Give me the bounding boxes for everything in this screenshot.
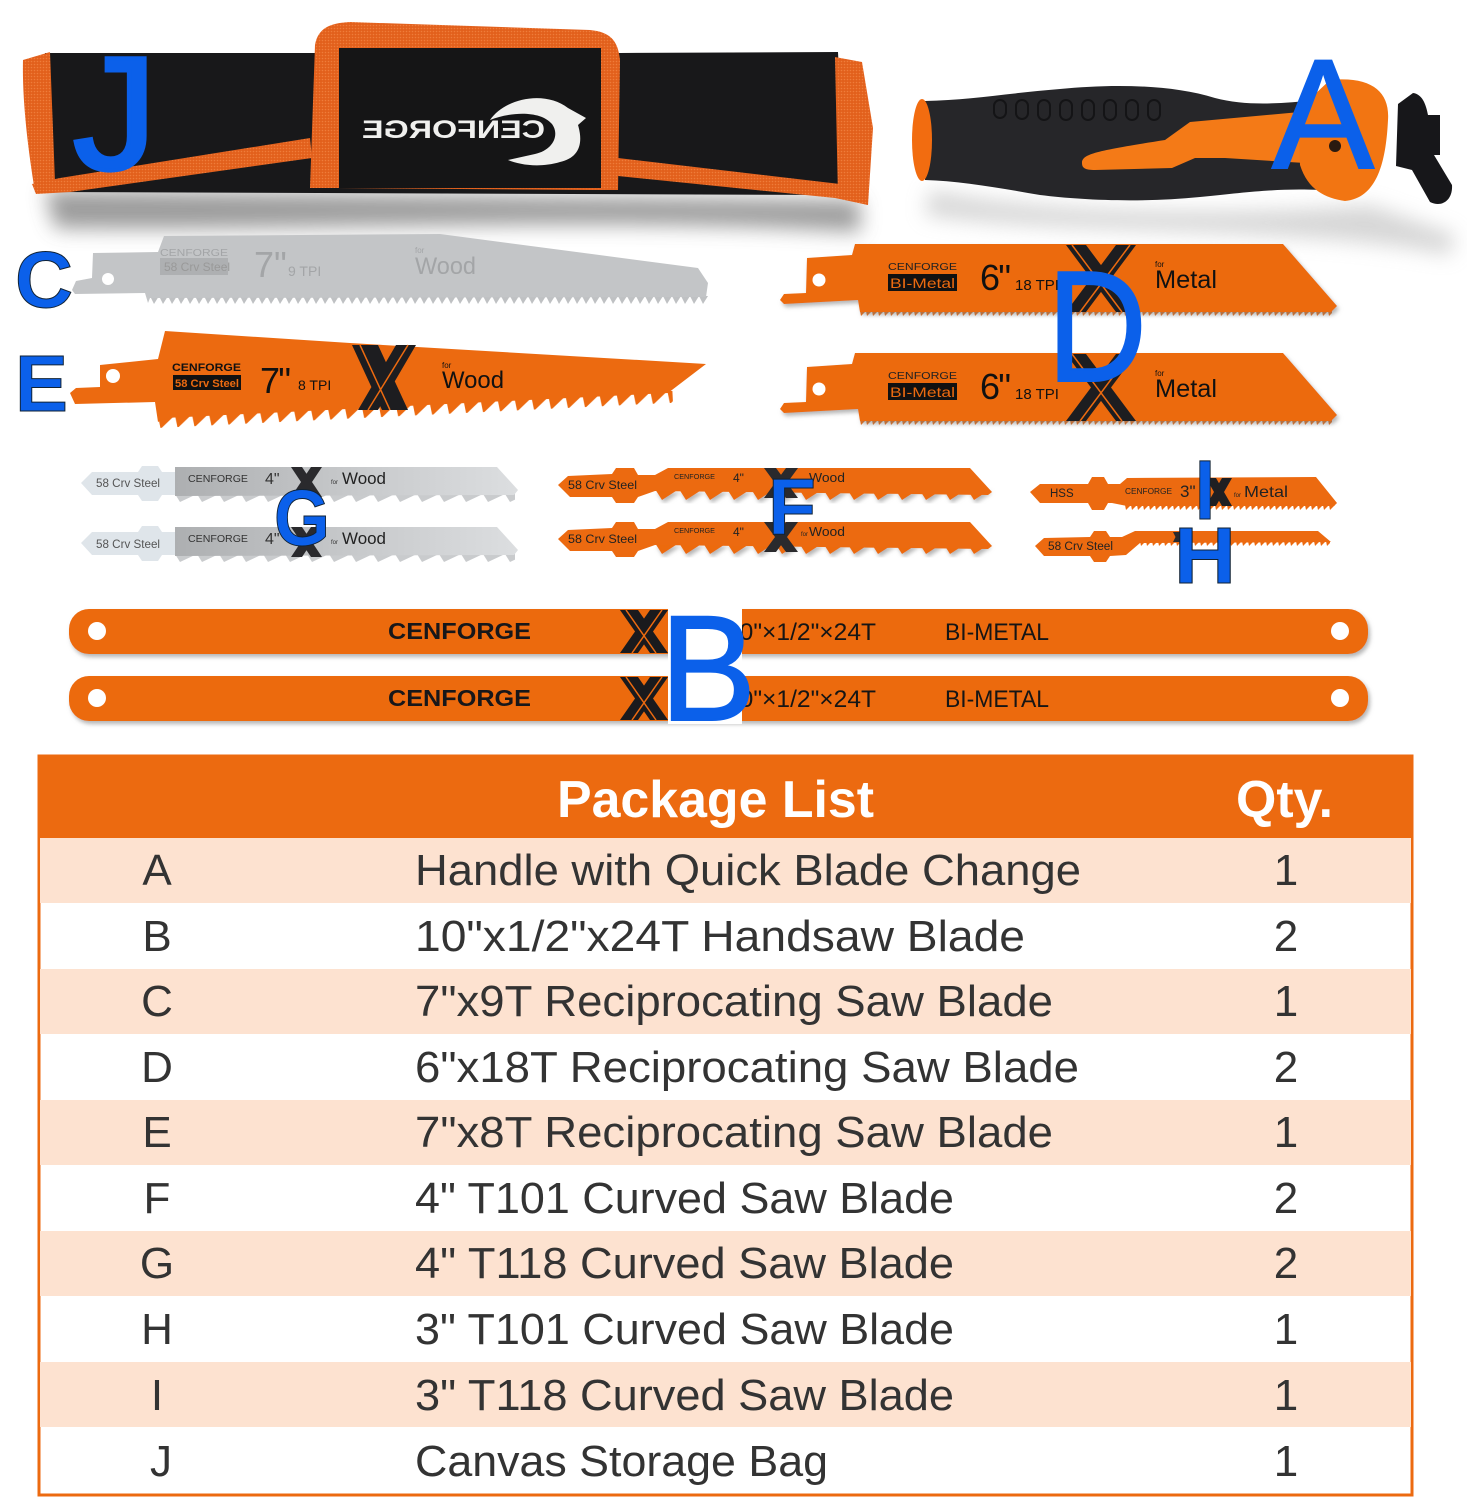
blade teeth <box>1125 505 1335 511</box>
X mark <box>291 467 322 497</box>
blade tang <box>81 466 176 501</box>
blue part letters: B <box>660 584 756 752</box>
bag left end binding <box>23 52 55 192</box>
quantity column: 1 <box>1274 846 1298 895</box>
striped rows <box>40 838 1411 1427</box>
quantity column: 2 <box>1274 1043 1298 1092</box>
handle shadow <box>925 190 1455 255</box>
blade E: orange wood blade: 8 TPI <box>298 377 331 393</box>
quantity column <box>1274 846 1298 1486</box>
blade E: orange wood blade <box>70 331 706 428</box>
part letters column: G <box>140 1239 174 1288</box>
blade F: lower orange jigsaw blade: for <box>801 532 808 538</box>
descriptions column: 6"x18T Reciprocating Saw Blade <box>415 1043 1079 1092</box>
blade body <box>1030 477 1337 510</box>
package list table <box>38 755 1413 1495</box>
quick change clamp <box>1396 93 1452 204</box>
handle with quick blade change <box>912 79 1455 255</box>
wordmark: CENFORGE <box>388 685 531 711</box>
part letters column: I <box>151 1371 163 1420</box>
blade F: upper orange jigsaw blade <box>558 468 992 503</box>
part letters column: J <box>150 1437 172 1486</box>
bag shadow <box>45 190 860 232</box>
descriptions column: 4" T118 Curved Saw Blade <box>415 1239 954 1288</box>
descriptions column: 3" T118 Curved Saw Blade <box>415 1371 954 1420</box>
blade B: upper handsaw blade <box>69 609 1368 654</box>
blade F: upper orange jigsaw blade: CENFORGE <box>674 474 715 481</box>
blade label: for <box>415 246 425 255</box>
blade body <box>558 468 992 503</box>
blade spec: 10"×1/2"×24T <box>726 686 876 713</box>
blade teeth <box>150 296 708 304</box>
blade label: 58 Crv Steel <box>568 478 637 492</box>
blade D: lower metal blade: Metal <box>1155 375 1217 403</box>
descriptions column: 7"x8T Reciprocating Saw Blade <box>415 1108 1053 1157</box>
blade D: lower metal blade: 6" <box>980 366 1011 407</box>
blade E: orange wood blade: Wood <box>442 367 504 394</box>
blade G: upper silver jigsaw blade <box>81 466 518 502</box>
logo panel <box>339 48 601 188</box>
blade teeth <box>158 391 673 428</box>
X mark <box>764 522 798 552</box>
orange nose <box>1298 79 1388 201</box>
X mark <box>620 610 668 653</box>
blade G: lower silver jigsaw blade: 4" <box>265 531 280 548</box>
blade label: 9 TPI <box>288 263 321 279</box>
gator logo <box>490 98 586 165</box>
blade D: upper metal blade: BI-Metal <box>890 275 955 291</box>
part letters column: C <box>141 977 173 1026</box>
blade G: upper silver jigsaw blade: CENFORGE <box>188 474 248 485</box>
blue part letters: F <box>768 462 816 551</box>
blade label: 58 Crv Steel <box>164 260 230 274</box>
blade spec: 10"×1/2"×24T <box>726 619 876 646</box>
X mark <box>1066 354 1136 421</box>
blade G: lower silver jigsaw blade: CENFORGE <box>188 534 248 545</box>
table header <box>38 755 1413 838</box>
blade G: lower silver jigsaw blade: Wood <box>342 529 386 548</box>
grip body <box>925 86 1320 200</box>
part letters column: A <box>142 846 172 895</box>
quantity column: 2 <box>1274 1239 1298 1288</box>
blue part letters: A <box>1272 28 1374 202</box>
logo wordmark: CENFORGE <box>362 116 545 144</box>
quantity column: 1 <box>1274 1437 1298 1486</box>
blade body <box>72 234 708 303</box>
part letters column <box>140 846 174 1486</box>
nose bolt <box>1329 140 1341 152</box>
blade label: 58 Crv Steel <box>1048 541 1113 553</box>
blade label: CENFORGE <box>172 362 241 374</box>
blade D: upper metal blade: 6" <box>980 257 1011 298</box>
blade teeth <box>175 494 515 502</box>
part letters column: F <box>144 1174 170 1223</box>
quantity column: 1 <box>1274 1305 1298 1354</box>
X mark <box>291 527 322 557</box>
blade C: silver reciprocating blade <box>72 234 708 304</box>
blade F: upper orange jigsaw blade: Wood <box>809 470 845 485</box>
grip ribs <box>994 100 1160 120</box>
blade E: orange wood blade: 58 Crv Steel <box>175 378 239 390</box>
blade I: HSS metal jigsaw blade: for <box>1234 493 1241 499</box>
blade G: lower silver jigsaw blade: for <box>331 540 338 546</box>
quantity column: 2 <box>1274 912 1298 961</box>
blade G: upper silver jigsaw blade: 4" <box>265 471 280 488</box>
descriptions column: Handle with Quick Blade Change <box>415 846 1081 895</box>
blade G: upper silver jigsaw blade: Wood <box>342 469 386 488</box>
blade teeth <box>860 311 1332 316</box>
blade label: CENFORGE <box>160 248 228 259</box>
blade D: upper metal blade: 18 TPI <box>1015 277 1059 294</box>
blade teeth <box>175 554 515 562</box>
blade G: upper silver jigsaw blade: for <box>331 480 338 486</box>
X mark <box>620 677 668 720</box>
strap loop with panel <box>310 22 620 190</box>
blade B: lower handsaw blade: BI-METAL <box>945 686 1049 713</box>
bag right end binding <box>835 57 873 205</box>
X mark <box>764 468 798 498</box>
mounting holes <box>88 689 106 707</box>
blade label: HSS <box>1050 488 1074 500</box>
blade label: 58 Crv Steel <box>96 537 160 551</box>
blade body <box>558 522 992 557</box>
blade G: lower silver jigsaw blade <box>81 526 518 562</box>
X mark <box>1173 532 1183 542</box>
blue part letters: H <box>1174 511 1236 600</box>
blade teeth <box>655 489 989 500</box>
orange end cap <box>912 99 932 181</box>
mounting holes <box>88 622 106 640</box>
canvas storage bag <box>23 22 873 232</box>
blade B: lower handsaw blade <box>69 676 1368 721</box>
quantity column: 1 <box>1274 1108 1298 1157</box>
blue part letters <box>15 24 1374 752</box>
blade body <box>1035 531 1331 562</box>
descriptions column: Canvas Storage Bag <box>415 1437 828 1486</box>
blue part letters: G <box>274 473 330 562</box>
blade D: lower metal blade: BI-Metal <box>890 384 955 400</box>
blade teeth <box>655 543 989 554</box>
blade D: upper metal blade <box>780 244 1337 316</box>
blade tang <box>81 526 176 561</box>
blade I: HSS metal jigsaw blade: CENFORGE <box>1125 487 1172 496</box>
blade body <box>780 353 1337 421</box>
blade label: Wood <box>415 253 476 280</box>
descriptions column: 7"x9T Reciprocating Saw Blade <box>415 977 1053 1026</box>
blade I: HSS metal jigsaw blade <box>1030 477 1337 511</box>
blue part letters: E <box>15 339 68 428</box>
blade body <box>69 609 1368 654</box>
blue part letters: J <box>73 24 157 204</box>
X mark <box>1066 245 1136 312</box>
bag roll body <box>45 52 845 195</box>
blade label: CENFORGE <box>888 371 957 382</box>
blade label: 58 Crv Steel <box>96 476 160 490</box>
blade label: 7" <box>254 244 287 285</box>
part letters column: H <box>141 1305 173 1354</box>
blade label: CENFORGE <box>888 262 957 273</box>
blade body <box>69 676 1368 721</box>
blade F: lower orange jigsaw blade: 4" <box>733 525 744 539</box>
blue part letters: C <box>15 235 73 324</box>
quantity column: 1 <box>1274 1371 1298 1420</box>
blade teeth <box>1140 541 1330 546</box>
blade E: orange wood blade: for <box>442 361 452 370</box>
blade F: lower orange jigsaw blade <box>558 522 992 557</box>
blade D: lower metal blade: for <box>1155 369 1165 378</box>
blade E: orange wood blade: 7" <box>260 360 291 401</box>
table header: Qty. <box>1236 771 1333 829</box>
descriptions column: 10"x1/2"x24T Handsaw Blade <box>415 912 1025 961</box>
part letters column: B <box>142 912 172 961</box>
blade I: HSS metal jigsaw blade: Metal <box>1244 484 1288 501</box>
descriptions column: 4" T101 Curved Saw Blade <box>415 1174 954 1223</box>
quantity column: 1 <box>1274 977 1298 1026</box>
table frame <box>39 756 1412 1495</box>
X mark <box>1206 478 1232 506</box>
blue part letters: I <box>1195 443 1215 537</box>
wordmark: CENFORGE <box>388 618 531 644</box>
X mark <box>352 345 416 410</box>
blade label <box>160 244 476 285</box>
blade label: 58 Crv Steel <box>568 532 637 546</box>
right strap <box>618 158 868 205</box>
descriptions column <box>415 846 1081 1486</box>
descriptions column: 3" T101 Curved Saw Blade <box>415 1305 954 1354</box>
blade teeth <box>860 420 1332 425</box>
blade D: upper metal blade: for <box>1155 260 1165 269</box>
blade D: upper metal blade: Metal <box>1155 266 1217 294</box>
left strap <box>32 138 312 194</box>
blade F: lower orange jigsaw blade: CENFORGE <box>674 528 715 535</box>
blade D: lower metal blade: 18 TPI <box>1015 386 1059 403</box>
blade body <box>70 331 706 422</box>
orange insert <box>1082 112 1305 170</box>
blade I: HSS metal jigsaw blade: 3" <box>1180 482 1196 501</box>
blade F: lower orange jigsaw blade: Wood <box>809 524 845 539</box>
blade body <box>175 527 518 556</box>
table header: Package List <box>557 771 874 829</box>
part letters column: E <box>142 1108 172 1157</box>
blue part letters: D <box>1047 239 1147 415</box>
blade B: upper handsaw blade: BI-METAL <box>945 619 1049 646</box>
blade H: slim jigsaw blade <box>1035 531 1331 562</box>
part letters column: D <box>141 1043 173 1092</box>
white backing behind letter B <box>668 606 742 724</box>
blade F: upper orange jigsaw blade: 4" <box>733 471 744 485</box>
blade body <box>175 467 518 496</box>
blade D: lower metal blade <box>780 353 1337 425</box>
quantity column: 2 <box>1274 1174 1298 1223</box>
blade body <box>780 244 1337 312</box>
